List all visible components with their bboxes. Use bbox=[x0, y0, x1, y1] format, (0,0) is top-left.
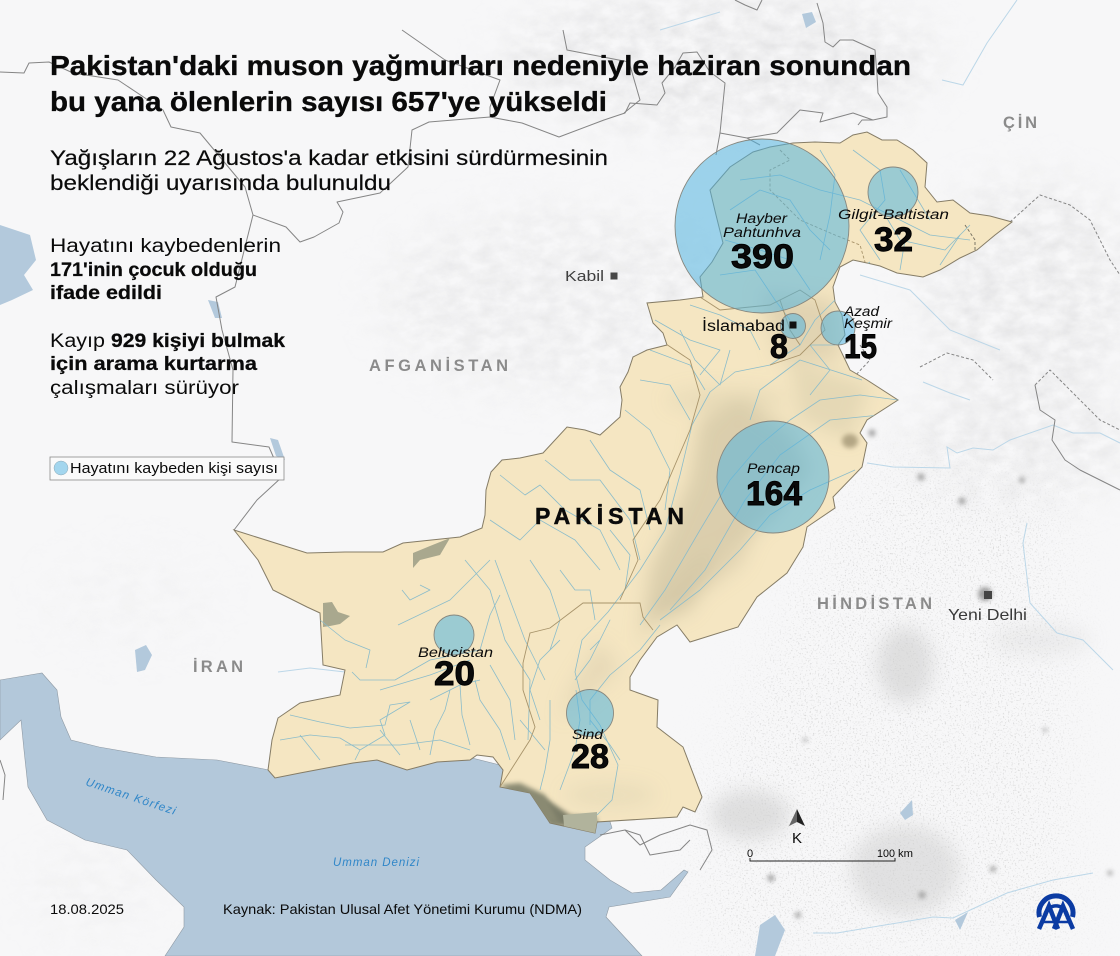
foreign rivers bbox=[278, 0, 1120, 933]
icon: north arrow: K bbox=[792, 830, 802, 847]
label: Pakistan: PAKİSTAN bbox=[535, 503, 684, 529]
data label: İslamabad bbox=[702, 317, 796, 366]
data label: Azad Keşmir: Azad bbox=[843, 304, 880, 319]
data label: Belucistan bbox=[418, 645, 493, 693]
urban speckle bbox=[700, 460, 1080, 956]
data label: Hayber Pahtunhva: Pahtunhva bbox=[723, 225, 802, 240]
text block: missing bbox=[50, 331, 285, 399]
populated areas bbox=[560, 290, 870, 807]
data label: İslamabad: İslamabad bbox=[702, 317, 785, 335]
circle: Pencap bbox=[717, 421, 829, 533]
circle: Sind bbox=[566, 690, 614, 736]
subtitle bbox=[50, 147, 608, 195]
date: 18.08.2025 bbox=[50, 902, 124, 917]
subtitle: beklendiği uyarısında bulunuldu bbox=[50, 172, 391, 195]
data label: Gilgit-Baltistan bbox=[838, 207, 949, 259]
data circles bbox=[434, 139, 918, 736]
data label: Hayber Pahtunhva: 390 bbox=[731, 238, 794, 276]
data label: Belucistan: 20 bbox=[434, 655, 475, 693]
text block: children: ifade edildi bbox=[50, 283, 162, 304]
scale bar: km bbox=[898, 848, 913, 860]
legend bbox=[50, 457, 284, 480]
data label: Pencap: Pencap bbox=[747, 461, 801, 476]
source: Kaynak: Pakistan Ulusal Afet Yönetimi Kurumu (NDMA) bbox=[223, 901, 582, 917]
data label: Azad Keşmir: Keşmir bbox=[844, 316, 893, 331]
title: bu yana ölenlerin sayısı 657'ye yükseldi bbox=[50, 86, 607, 117]
sea bbox=[0, 673, 688, 956]
sea labels: Umman Denizi bbox=[333, 857, 419, 869]
city: Yeni Delhi: Yeni Delhi bbox=[948, 607, 1027, 624]
legend: Hayatını kaybeden kişi sayısı bbox=[70, 461, 278, 477]
data label: Azad Keşmir: 15 bbox=[844, 328, 877, 366]
text block: missing: Kayıp bbox=[50, 331, 105, 352]
data label: Hayber Pahtunhva bbox=[723, 211, 802, 276]
data label: Pencap: 164 bbox=[746, 475, 802, 513]
country labels: İRAN bbox=[193, 658, 243, 676]
city: Yeni Delhi bbox=[948, 591, 1027, 624]
text block: missing: 929 kişiyi bulmak bbox=[111, 331, 285, 352]
title: Pakistan'daki muson yağmurları nedeniyle haziran sonundan bbox=[50, 50, 911, 81]
country labels: HİNDİSTAN bbox=[817, 595, 932, 613]
scale bar: 0 bbox=[747, 848, 753, 860]
map: Pakistan bbox=[234, 132, 1012, 835]
circle: Azad Keşmir bbox=[821, 311, 855, 345]
country labels bbox=[193, 114, 1037, 676]
circle: Hayber Pahtunhva bbox=[675, 139, 849, 313]
scale bar: 100 bbox=[877, 848, 895, 860]
subtitle: Yağışların 22 Ağustos'a kadar etkisini sürdürmesinin bbox=[50, 147, 608, 170]
data label: Azad Keşmir bbox=[843, 304, 893, 366]
scale bar bbox=[747, 848, 913, 861]
text block: children bbox=[50, 236, 281, 304]
icon: north arrow bbox=[789, 809, 805, 847]
data label: Hayber Pahtunhva: Hayber bbox=[736, 211, 788, 226]
sea labels bbox=[84, 776, 419, 869]
data label: Gilgit-Baltistan: Gilgit-Baltistan bbox=[838, 207, 949, 222]
circle: Gilgit-Baltistan bbox=[868, 167, 918, 217]
country labels: AFGANİSTAN bbox=[369, 357, 508, 375]
text block: children: Hayatını kaybedenlerin bbox=[50, 236, 281, 257]
icon: AA logo bbox=[1039, 896, 1073, 929]
province boundaries bbox=[500, 290, 825, 787]
lakes in Pakistan bbox=[323, 602, 350, 627]
text block: missing: çalışmaları sürüyor bbox=[50, 378, 240, 399]
country labels: ÇİN bbox=[1003, 114, 1037, 132]
data label: Sind: 28 bbox=[571, 738, 609, 776]
coastal delta bbox=[500, 783, 597, 835]
title bbox=[50, 50, 911, 117]
circle: İslamabad bbox=[780, 314, 806, 338]
data label: Gilgit-Baltistan: 32 bbox=[874, 221, 913, 259]
data label: Sind: Sind bbox=[572, 727, 604, 742]
city: Kabil bbox=[565, 268, 618, 285]
text block: children: 171'inin çocuk olduğu bbox=[50, 260, 257, 281]
rivers bbox=[280, 150, 970, 815]
data label: İslamabad: 8 bbox=[770, 328, 788, 366]
sea labels: Umman Körfezi bbox=[84, 776, 177, 818]
data label: Belucistan: Belucistan bbox=[418, 645, 493, 660]
circle: Belucistan bbox=[434, 615, 474, 655]
city: Kabil: Kabil bbox=[565, 268, 604, 285]
text block: missing: için arama kurtarma bbox=[50, 354, 257, 375]
